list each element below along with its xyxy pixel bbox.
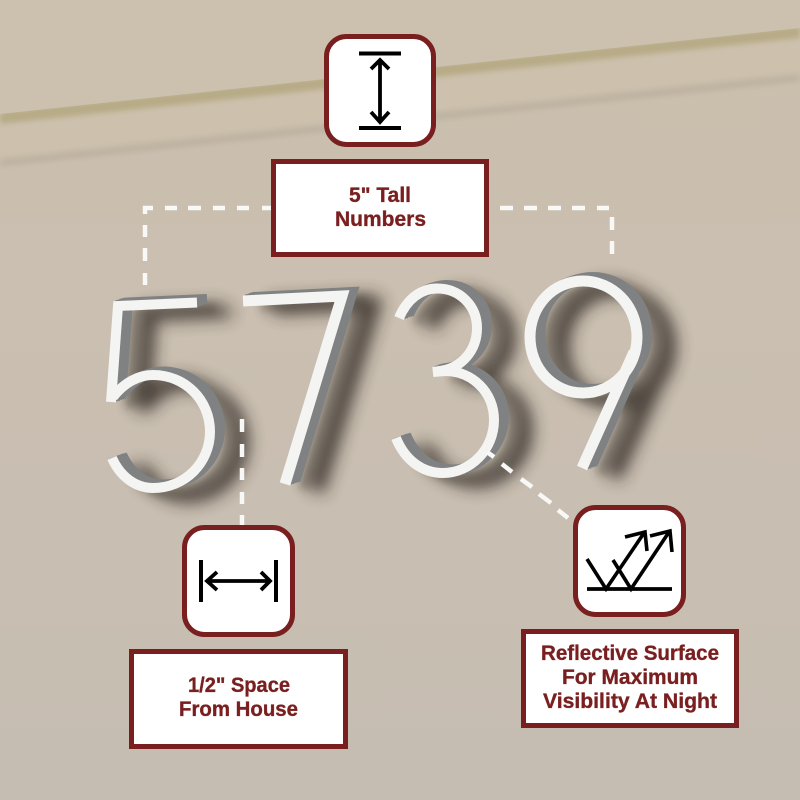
callout: half inch space from house bbox=[132, 528, 346, 746]
label: reflective surface: Reflective Surface bbox=[541, 642, 719, 665]
label: half inch space from house: From House bbox=[179, 698, 298, 721]
icon: reflection arrows bbox=[576, 508, 684, 614]
digit 3 bbox=[396, 285, 504, 473]
label: 5 inch tall numbers bbox=[274, 162, 486, 254]
label: half inch space from house: 1/2" Space bbox=[188, 674, 290, 697]
label: reflective surface bbox=[524, 632, 736, 726]
dashed connector: space from house bbox=[240, 419, 244, 525]
dashed connector: height left bbox=[145, 208, 271, 285]
digit 7 bbox=[243, 292, 352, 484]
label: reflective surface: Visibility At Night bbox=[543, 690, 717, 713]
dashed connector: height right bbox=[500, 208, 612, 254]
dashed connector: reflective surface bbox=[487, 452, 568, 518]
house number 5739 bbox=[111, 278, 671, 498]
icon: width arrow bbox=[184, 528, 292, 634]
digit 5 bbox=[111, 299, 220, 488]
digit 9 bbox=[530, 278, 647, 468]
label: half inch space from house bbox=[132, 652, 346, 746]
digit shadows bbox=[129, 287, 671, 498]
callout: reflective surface bbox=[524, 508, 736, 726]
label: 5 inch tall numbers: Numbers bbox=[335, 208, 426, 231]
icon: height arrow bbox=[326, 36, 434, 144]
label: 5 inch tall numbers: 5" Tall bbox=[349, 184, 411, 207]
label: reflective surface: For Maximum bbox=[562, 666, 698, 689]
callout: 5 inch tall numbers bbox=[274, 36, 486, 254]
